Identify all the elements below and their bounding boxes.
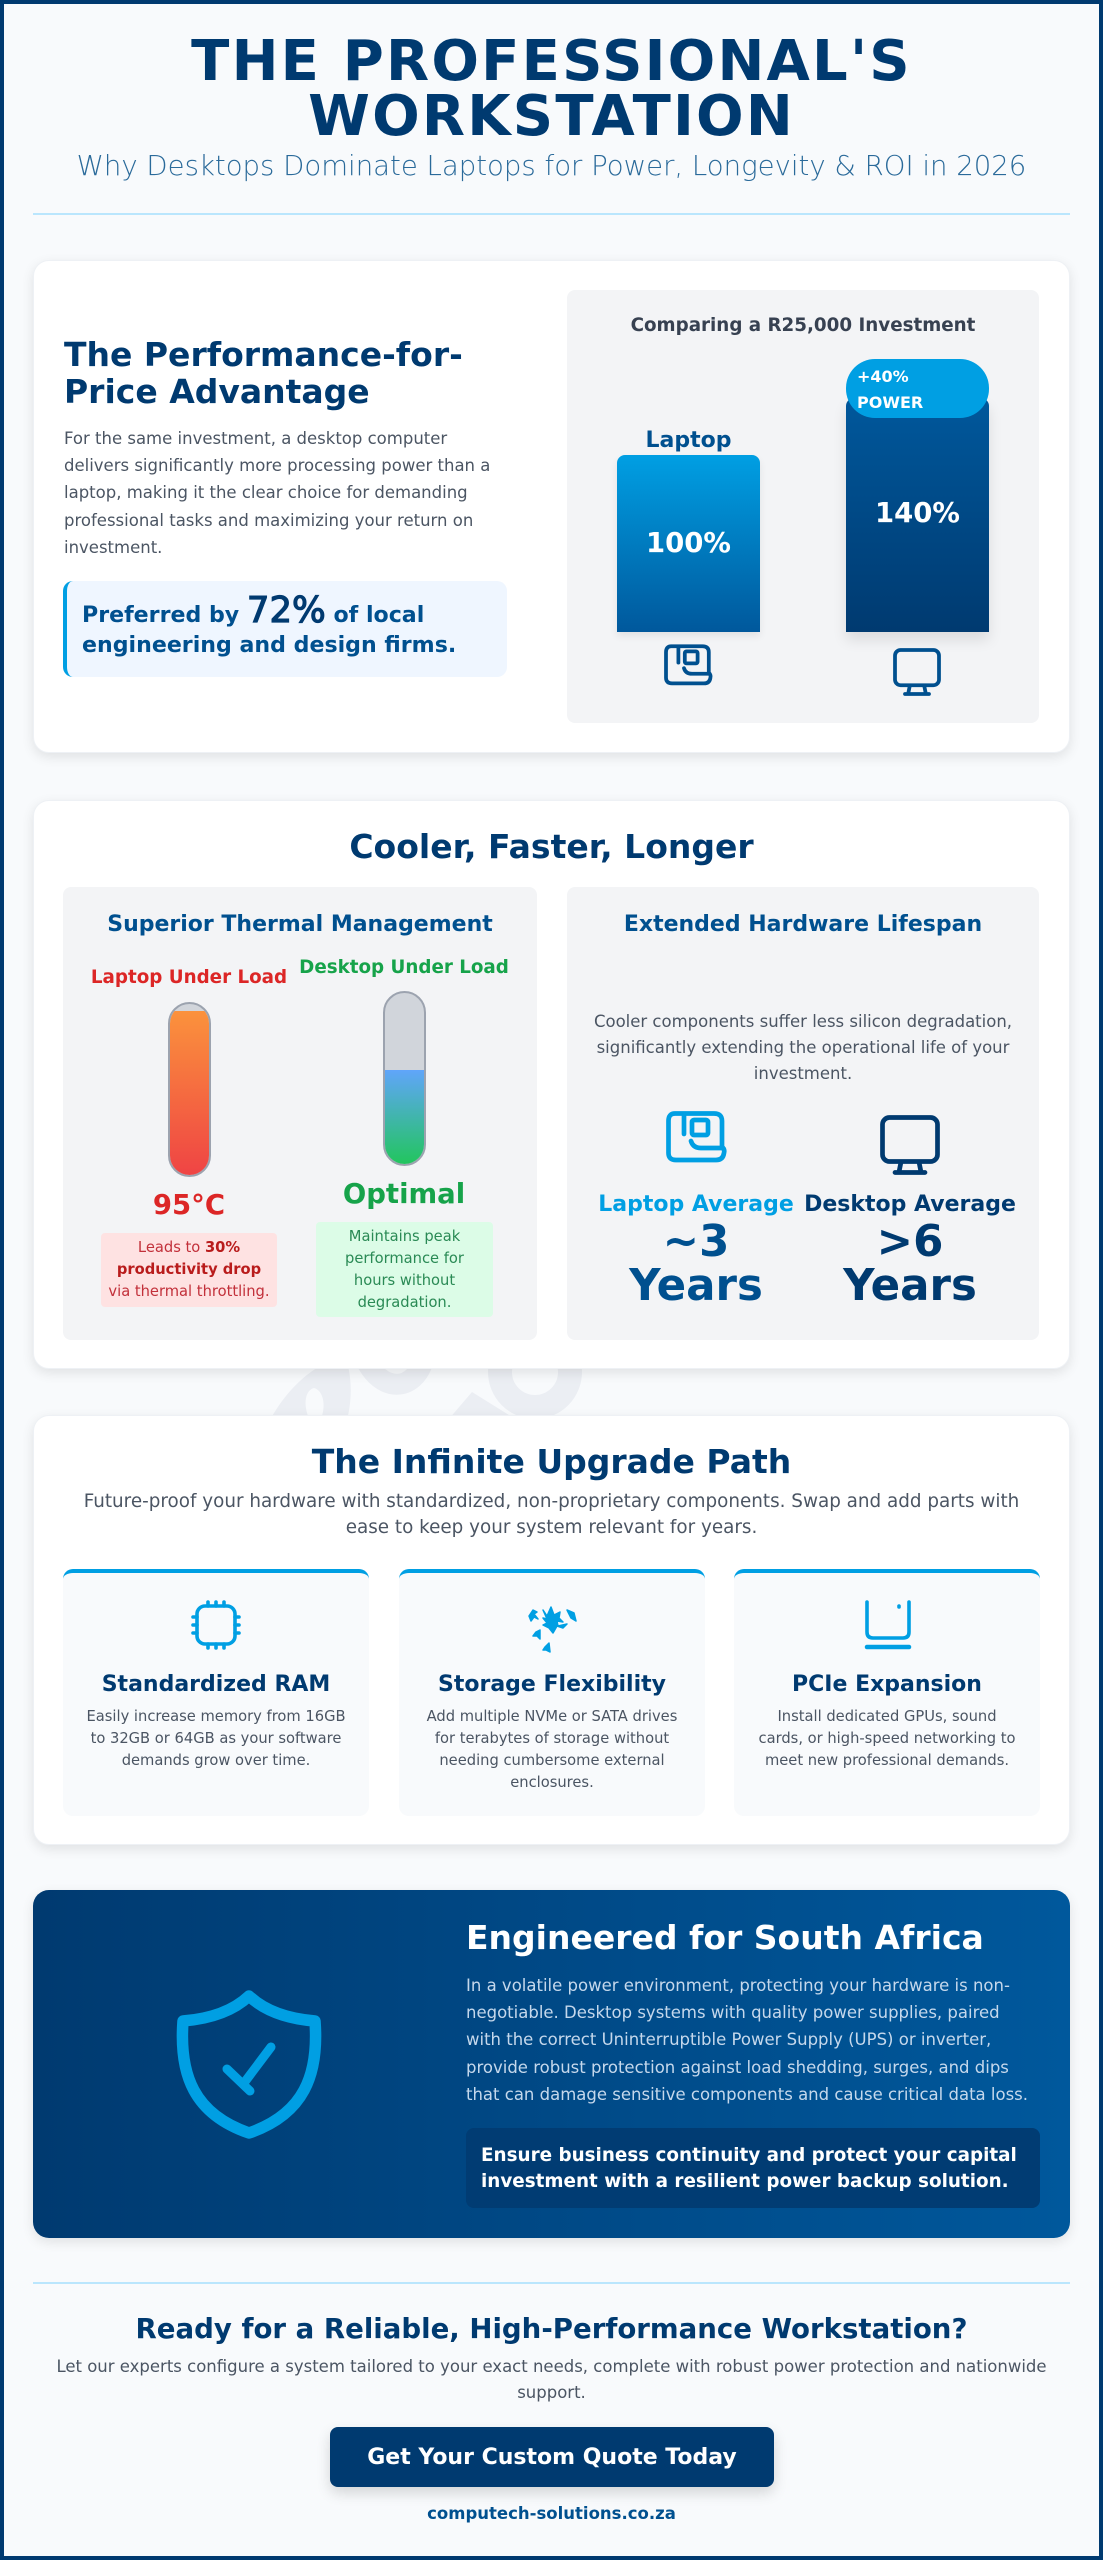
text: PCIe: meet new professional demands. <box>765 1752 1009 1769</box>
icon: shield <box>176 1990 322 2139</box>
text: performance description: investment. <box>64 538 162 557</box>
text: PCIe <box>758 1708 1016 1769</box>
text: performance description: For the same investment, a desktop computer <box>64 429 447 448</box>
callout: business continuity: Ensure business continuity and protect your capital <box>481 2145 1017 2166</box>
thermometer: desktop <box>383 991 426 1166</box>
heading: lifespan: Extended Hardware Lifespan <box>624 912 982 937</box>
callout text <box>82 590 456 658</box>
heading: South Africa: Engineered for South Africa <box>466 1918 984 1957</box>
heading: storage: Storage Flexibility <box>438 1672 666 1697</box>
chart title: Comparing a R25,000 Investment <box>631 315 975 336</box>
text: South Africa <box>466 1976 1028 2104</box>
note: peak performance <box>316 1222 493 1317</box>
value: laptop years <box>628 1217 763 1311</box>
value: laptop years: Years <box>629 1261 763 1311</box>
card: RAM <box>63 1569 369 1816</box>
bar value: laptop: 100% <box>646 527 731 559</box>
text: storage: Add multiple NVMe or SATA drives <box>427 1708 677 1725</box>
text: performance description: professional tasks and maximizing your return on <box>64 511 473 530</box>
note: productivity drop: Leads to 30% <box>138 1239 240 1256</box>
label: laptop: Laptop <box>646 428 732 453</box>
text: South Africa: provide robust protection against load shedding, surges, and dips <box>466 2058 1009 2077</box>
text: upgrade intro <box>84 1491 1019 1538</box>
note: peak performance: degradation. <box>358 1294 451 1311</box>
callout: business continuity <box>466 2128 1040 2208</box>
note: peak performance: hours without <box>354 1272 455 1289</box>
text: upgrade intro: ease to keep your system relevant for years. <box>346 1517 757 1538</box>
heading: cooler faster longer: Cooler, Faster, Longer <box>349 827 754 866</box>
icon: PCIe <box>864 1600 912 1650</box>
text: storage: enclosures. <box>510 1774 594 1791</box>
heading: RAM: Standardized RAM <box>102 1672 330 1697</box>
text: PCIe: Install dedicated GPUs, sound <box>777 1708 997 1725</box>
text: RAM <box>86 1708 346 1769</box>
text: RAM: to 32GB or 64GB as your software <box>91 1730 341 1747</box>
text: lifespan description: investment. <box>754 1064 852 1083</box>
text: storage: needing cumbersome external <box>439 1752 665 1769</box>
footer text: Let our experts configure a system tailored to your exact needs, complete with robust power protection and nationwide <box>56 2357 1047 2376</box>
panel: thermal <box>63 887 537 1340</box>
text: upgrade intro: Future-proof your hardware with standardized, non-proprietary components. Swap and add parts with <box>84 1491 1019 1512</box>
note: peak performance: Maintains peak <box>349 1228 460 1245</box>
callout text: Preferred by 72% of local <box>82 590 424 631</box>
heading: upgrade path: The Infinite Upgrade Path <box>312 1442 791 1481</box>
text: storage <box>426 1708 677 1791</box>
text: lifespan description: Cooler components suffer less silicon degradation, <box>594 1012 1012 1031</box>
watermark <box>273 1369 582 1415</box>
label: laptop average: Laptop Average <box>598 1192 794 1217</box>
text: RAM: Easily increase memory from 16GB <box>86 1708 346 1725</box>
callout: 72 percent <box>63 581 507 677</box>
callout text: engineering and design firms. <box>82 632 456 658</box>
header: subtitle: Why Desktops Dominate Laptops for Power, Longevity & ROI in 2026 <box>77 150 1026 182</box>
footer link: computech-solutions.co.za <box>427 2504 676 2523</box>
badge: +40% power: POWER <box>857 393 923 412</box>
bar value: desktop: 140% <box>875 497 960 529</box>
value: desktop years: >6 <box>877 1217 943 1267</box>
note: productivity drop <box>101 1233 277 1307</box>
value: 95C: 95°C <box>153 1189 225 1221</box>
icon: storage <box>528 1606 577 1653</box>
callout: business continuity: investment with a resilient power backup solution. <box>481 2171 1009 2192</box>
footer text: support. <box>517 2383 586 2402</box>
thermometer: laptop <box>168 1002 211 1177</box>
value: desktop years <box>842 1217 977 1311</box>
text: lifespan description: significantly extending the operational life of your <box>597 1038 1009 1057</box>
label: desktop under load: Desktop Under Load <box>299 957 509 978</box>
icon: desktop <box>893 648 941 696</box>
heading: performance: The Performance-for- <box>64 335 463 374</box>
label: laptop under load: Laptop Under Load <box>91 967 287 988</box>
text: storage: for terabytes of storage without <box>435 1730 669 1747</box>
bar: desktop <box>846 398 989 632</box>
panel: performance for price <box>33 260 1070 753</box>
text: lifespan description <box>594 1012 1012 1083</box>
icon: laptop <box>664 644 712 686</box>
panel: upgrade path <box>33 1415 1070 1845</box>
text: performance description: delivers significantly more processing power than a <box>64 456 490 475</box>
heading: PCIe: PCIe Expansion <box>792 1672 982 1697</box>
button: get quote: Get Your Custom Quote Today <box>367 2445 737 2470</box>
badge: +40% power: +40% <box>857 367 909 386</box>
text: South Africa: that can damage sensitive components and cause critical data loss. <box>466 2085 1028 2104</box>
text: South Africa: with the correct Uninterruptible Power Supply (UPS) or inverter, <box>466 2030 991 2049</box>
header: title <box>191 29 912 149</box>
heading: performance <box>64 335 463 410</box>
value: laptop years: ~3 <box>663 1217 729 1267</box>
text: performance description: laptop, making it the clear choice for demanding <box>64 483 468 502</box>
card: PCIe <box>734 1569 1040 1816</box>
text: PCIe: cards, or high-speed networking to <box>758 1730 1016 1747</box>
text: South Africa: In a volatile power environment, protecting your hardware is non- <box>466 1976 1010 1995</box>
button: get quote <box>330 2427 774 2487</box>
badge: +40% power <box>846 359 989 418</box>
value: optimal: Optimal <box>343 1178 465 1210</box>
text: performance description <box>64 429 490 557</box>
value: desktop years: Years <box>843 1261 977 1311</box>
note: productivity drop: productivity drop <box>117 1261 261 1278</box>
icon: laptop lifespan <box>666 1111 727 1162</box>
bar: laptop <box>617 455 760 632</box>
note: productivity drop: via thermal throttling. <box>108 1283 270 1300</box>
icon: chip <box>191 1600 241 1650</box>
heading: performance: Price Advantage <box>64 372 370 410</box>
panel: cooler faster longer <box>33 800 1070 1369</box>
note: peak performance: performance for <box>345 1250 464 1267</box>
label: desktop average: Desktop Average <box>804 1192 1016 1217</box>
header: title: THE PROFESSIONAL'S <box>191 29 912 94</box>
panel: investment chart <box>567 290 1039 723</box>
text: RAM: demands grow over time. <box>122 1752 310 1769</box>
header: title: WORKSTATION <box>308 84 795 149</box>
panel: lifespan <box>567 887 1039 1340</box>
footer heading: Ready for a Reliable, High-Performance Workstation? <box>136 2312 967 2345</box>
panel: engineered for South Africa <box>33 1890 1070 2238</box>
card: storage <box>399 1569 705 1816</box>
text: South Africa: negotiable. Desktop systems with quality power supplies, paired <box>466 2003 1000 2022</box>
footer text <box>56 2357 1047 2402</box>
icon: desktop lifespan <box>880 1115 940 1175</box>
heading: thermal: Superior Thermal Management <box>107 912 493 937</box>
